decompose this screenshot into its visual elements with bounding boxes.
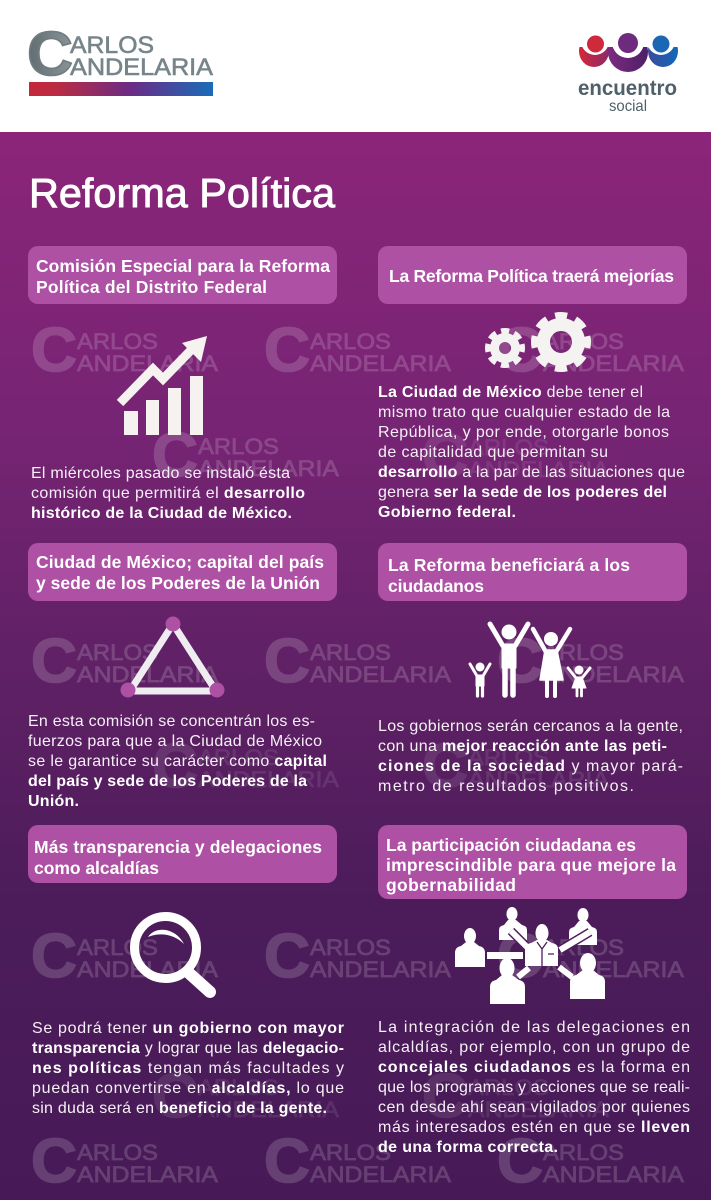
watermark pattern: ARLOS (543, 329, 624, 354)
heading: capital del país (28, 543, 337, 601)
watermark pattern: ARLOS (198, 1075, 279, 1100)
watermark pattern: ARLOS (77, 935, 158, 960)
watermark pattern: ANDELARIA (77, 957, 218, 982)
text block: capital del país: En esta comisión se concentrán los es- (28, 713, 315, 730)
watermark pattern: C (264, 922, 310, 991)
heading: participación ciudadana: gobernabilidad (386, 875, 516, 895)
watermark pattern: C (152, 732, 198, 801)
watermark pattern: ANDELARIA (543, 957, 684, 982)
watermark pattern: C (264, 1127, 310, 1196)
watermark pattern: C (31, 1127, 77, 1196)
heading: comisión especial: Comisión Especial para la Reforma (36, 256, 330, 276)
text block: participación ciudadana: de una forma correcta. (378, 1139, 558, 1156)
text block: capital del país: fuerzos para que a la Ciudad de México (28, 733, 322, 750)
watermark pattern: C (422, 1062, 468, 1131)
text block: mejorías: de capitalidad que permitan su (378, 444, 608, 461)
text block: ciudadanos (378, 718, 683, 795)
text block: ciudadanos: ciones de la sociedad y mayor pará- (378, 758, 683, 775)
panel: mejorías (378, 246, 687, 521)
watermark pattern: ARLOS (468, 1075, 549, 1100)
icon: connected people network (455, 907, 605, 1004)
icon: family with raised arms (470, 624, 590, 696)
watermark pattern: ANDELARIA (77, 1162, 218, 1187)
watermark pattern: ANDELARIA (468, 457, 609, 482)
watermark pattern: ARLOS (543, 1140, 624, 1165)
panel: participación ciudadana (378, 825, 690, 1156)
heading: participación ciudadana (378, 825, 687, 899)
text block: comisión especial: El miércoles pasado se instaló ésta (31, 465, 290, 482)
text block: ciudadanos: con una mejor reacción ante las peti- (378, 738, 667, 755)
watermark pattern: ARLOS (468, 745, 549, 770)
text block: participación ciudadana (378, 1019, 690, 1156)
watermark pattern: C (497, 1127, 543, 1196)
text block: participación ciudadana: alcaldías, por ejemplo, con un grupo de (378, 1039, 690, 1056)
text block: ciudadanos: Los gobiernos serán cercanos a la gente, (378, 718, 683, 735)
text block: mejorías: mismo trato que cualquier estado de la (378, 404, 670, 421)
icon: gears (488, 316, 588, 368)
icon: growth chart with arrow (120, 336, 207, 435)
text block: transparencia: sin duda será en beneficio de la gente. (32, 1100, 327, 1117)
watermark pattern: C (152, 1062, 198, 1131)
watermark pattern: ANDELARIA (310, 662, 451, 687)
heading: mejorías (378, 246, 687, 304)
watermark pattern: ARLOS (77, 329, 158, 354)
panel: capital del país (28, 543, 337, 810)
heading: ciudadanos: ciudadanos (388, 576, 484, 596)
watermark pattern: C (422, 732, 468, 801)
text block: transparencia: transparencia y lograr que las delegacio- (32, 1040, 344, 1057)
logo: encuentro social: social (609, 98, 647, 115)
watermark pattern: ANDELARIA (198, 767, 339, 792)
heading: participación ciudadana: imprescindible para que mejore la (386, 855, 676, 875)
watermark pattern: ARLOS (310, 640, 391, 665)
watermark pattern: ANDELARIA (198, 456, 339, 481)
title: Reforma Política (29, 170, 335, 216)
panel: ciudadanos (378, 543, 687, 795)
watermark pattern: C (152, 421, 198, 490)
watermark pattern: ANDELARIA (468, 1097, 609, 1122)
icon: magnifying glass (134, 916, 210, 992)
heading: comisión especial: Política del Distrito Federal (36, 277, 267, 297)
watermark pattern: ANDELARIA (310, 1162, 451, 1187)
panel: transparencia (28, 825, 344, 1117)
watermark pattern: ARLOS (77, 640, 158, 665)
watermark pattern: C (497, 316, 543, 385)
text block: transparencia: nes políticas tengan más facultades y (32, 1060, 344, 1077)
watermark pattern: ARLOS (543, 935, 624, 960)
watermark pattern: ANDELARIA (77, 662, 218, 687)
logo: Carlos Candelaria: ANDELARIA (70, 54, 213, 81)
watermark pattern: ANDELARIA (468, 767, 609, 792)
text block: participación ciudadana: cen desde ahí sean vigilados por quienes (378, 1099, 690, 1116)
text block: mejorías: Gobierno federal. (378, 504, 516, 521)
watermark pattern: C (497, 922, 543, 991)
heading: transparencia: como alcaldías (34, 858, 159, 878)
watermark pattern: ANDELARIA (310, 351, 451, 376)
watermark pattern: ANDELARIA (310, 957, 451, 982)
watermark pattern: ANDELARIA (198, 1097, 339, 1122)
heading: capital del país: Ciudad de México; capital del país (36, 552, 324, 572)
heading: comisión especial (28, 246, 337, 304)
logo: encuentro social: encuentro (578, 77, 677, 100)
icon: triangle with nodes (120, 616, 224, 698)
watermark pattern: ARLOS (77, 1140, 158, 1165)
heading: transparencia (28, 825, 337, 883)
watermark pattern: ARLOS (468, 435, 549, 460)
text block: participación ciudadana: más interesados estén en que se lleven (378, 1119, 690, 1136)
heading: mejorías: La Reforma Política traerá mejorías (389, 266, 674, 286)
text block: transparencia: Se podrá tener un gobierno con mayor (32, 1020, 344, 1037)
watermark pattern: C (31, 922, 77, 991)
heading: transparencia: Más transparencia y delegaciones (34, 837, 322, 857)
text block: comisión especial: comisión que permitirá el desarrollo (31, 485, 305, 502)
text block: transparencia: puedan convertirse en alcaldías, lo que (32, 1080, 344, 1097)
logo: Carlos Candelaria: C (27, 20, 73, 89)
heading: capital del país: y sede de los Poderes de la Unión (36, 573, 320, 593)
watermark pattern (31, 316, 684, 1196)
logo: Carlos Candelaria: ARLOS (70, 32, 154, 59)
watermark pattern: ARLOS (310, 935, 391, 960)
text block: mejorías: genera ser la sede de los poderes del (378, 484, 667, 501)
watermark pattern: ARLOS (543, 640, 624, 665)
watermark pattern: C (264, 627, 310, 696)
watermark pattern: C (264, 316, 310, 385)
watermark pattern: ARLOS (198, 434, 279, 459)
logo: Carlos Candelaria (27, 20, 213, 96)
text block: capital del país: del país y sede de los Poderes de la (28, 773, 307, 790)
text block: capital del país (28, 713, 327, 810)
text block: participación ciudadana: La integración de las delegaciones en (378, 1019, 690, 1036)
text block: mejorías: La Ciudad de México debe tener el (378, 384, 643, 401)
heading: ciudadanos: La Reforma beneficiará a los (388, 555, 630, 575)
watermark pattern: ANDELARIA (543, 351, 684, 376)
watermark pattern: ARLOS (310, 329, 391, 354)
watermark pattern: C (31, 316, 77, 385)
watermark pattern: ARLOS (198, 745, 279, 770)
white header band (0, 0, 711, 132)
text block: capital del país: se le garantice su carácter como capital (28, 753, 327, 770)
text block: comisión especial: histórico de la Ciudad de México. (31, 505, 292, 522)
watermark pattern: ANDELARIA (543, 662, 684, 687)
text block: mejorías: desarrollo a la par de las situaciones que (378, 464, 685, 481)
watermark pattern: ANDELARIA (77, 351, 218, 376)
text block: capital del país: Unión. (28, 793, 79, 810)
text block: participación ciudadana: que los programas y acciones que se reali- (378, 1079, 690, 1096)
text block: mejorías (378, 384, 685, 521)
text block: ciudadanos: metro de resultados positivos. (378, 778, 634, 795)
panel: comisión especial (28, 246, 337, 522)
watermark pattern: C (497, 627, 543, 696)
logo: encuentro social (578, 33, 678, 111)
text block: comisión especial (31, 465, 305, 522)
text block: participación ciudadana: concejales ciudadanos es la forma en (378, 1059, 690, 1076)
watermark pattern: ANDELARIA (543, 1162, 684, 1187)
watermark pattern: C (31, 627, 77, 696)
text block: mejorías: República, y por ende, otorgarle bonos (378, 424, 669, 441)
heading: ciudadanos (378, 543, 687, 601)
text block: transparencia (32, 1020, 344, 1117)
watermark pattern: ARLOS (310, 1140, 391, 1165)
watermark pattern: C (422, 422, 468, 491)
heading: participación ciudadana: La participación ciudadana es (386, 835, 636, 855)
